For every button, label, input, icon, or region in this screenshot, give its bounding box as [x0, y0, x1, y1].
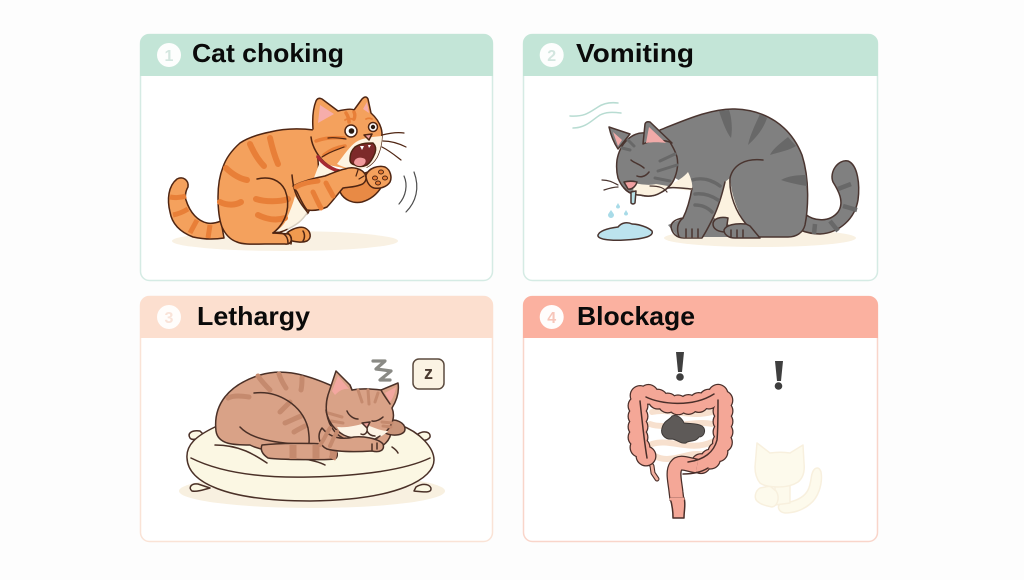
chest	[668, 172, 692, 190]
belly	[714, 178, 746, 226]
header: blockage: 4	[547, 310, 556, 327]
header: vomiting: 2	[547, 48, 556, 65]
header: vomiting	[523, 34, 878, 76]
thigh line	[257, 178, 288, 233]
near ear	[643, 122, 672, 144]
head	[313, 97, 382, 169]
mouth	[350, 143, 376, 166]
head stripes	[328, 390, 392, 427]
body	[216, 372, 391, 450]
chest	[273, 196, 308, 233]
illustration: sleeping cat on cushion	[179, 359, 445, 508]
stripes	[719, 110, 807, 186]
droplets	[608, 203, 628, 218]
puddle	[598, 223, 652, 240]
closed eyes	[347, 411, 383, 421]
z letters	[373, 361, 391, 380]
collar	[311, 137, 340, 171]
front leg outline	[671, 188, 713, 238]
motion lines	[399, 172, 417, 212]
tail	[168, 178, 224, 239]
stripes	[220, 138, 288, 219]
head	[617, 133, 678, 196]
panel: blockage	[523, 296, 878, 542]
blockage mass	[662, 415, 705, 443]
header: cat choking: Cat choking	[192, 38, 344, 68]
header: lethargy: Lethargy	[197, 301, 311, 331]
head stripes	[622, 140, 677, 181]
header: cat choking: 1	[165, 48, 174, 65]
whiskers	[602, 180, 667, 192]
white muzzle	[632, 183, 668, 196]
drool	[631, 191, 636, 204]
far arm	[340, 172, 382, 203]
smell lines	[570, 103, 621, 128]
thigh line	[254, 393, 309, 450]
icon: exclamation mark right	[775, 361, 783, 390]
panel: cat choking	[140, 34, 493, 280]
cushion corners	[189, 431, 431, 492]
body	[218, 129, 319, 244]
face white	[337, 136, 382, 169]
illustration: large intestine	[638, 392, 723, 518]
header: lethargy: 3	[165, 310, 174, 327]
head stripes	[316, 112, 355, 155]
illustration: orange cat choking	[168, 97, 417, 251]
thigh line	[730, 160, 763, 224]
illustration: small intestine	[650, 402, 712, 459]
far paw	[385, 420, 405, 435]
nose and mouth	[624, 181, 637, 189]
stripes	[228, 374, 305, 432]
tail	[261, 443, 337, 460]
header: blockage: Blockage	[577, 301, 695, 331]
panel: lethargy	[140, 296, 493, 542]
closed eyes	[631, 160, 649, 177]
illustration: faint cat silhouette	[755, 443, 821, 513]
head & ear	[326, 371, 398, 443]
nose	[362, 422, 370, 428]
eyes	[345, 125, 357, 137]
sigmoid and rectum	[674, 463, 697, 500]
z badge: z	[424, 363, 433, 383]
cushion	[187, 425, 434, 501]
whiskers	[382, 133, 406, 160]
front paw	[319, 428, 383, 452]
header: lethargy	[140, 296, 493, 338]
header: cat choking	[140, 34, 493, 76]
white muzzle	[337, 424, 388, 442]
tail	[800, 161, 859, 234]
body	[660, 109, 808, 237]
illustration: grey cat vomiting	[570, 103, 859, 247]
icon: exclamation mark left	[676, 352, 684, 381]
header: blockage	[523, 296, 878, 338]
near arm	[293, 168, 366, 210]
nose	[364, 134, 372, 140]
panel: vomiting	[523, 34, 878, 280]
far back paw	[288, 227, 310, 242]
back paws	[713, 217, 728, 232]
header: vomiting: Vomiting	[576, 38, 694, 68]
z badge	[413, 359, 444, 389]
inner contour lines	[640, 394, 718, 462]
far ear	[609, 127, 630, 149]
raised paw	[366, 166, 391, 188]
